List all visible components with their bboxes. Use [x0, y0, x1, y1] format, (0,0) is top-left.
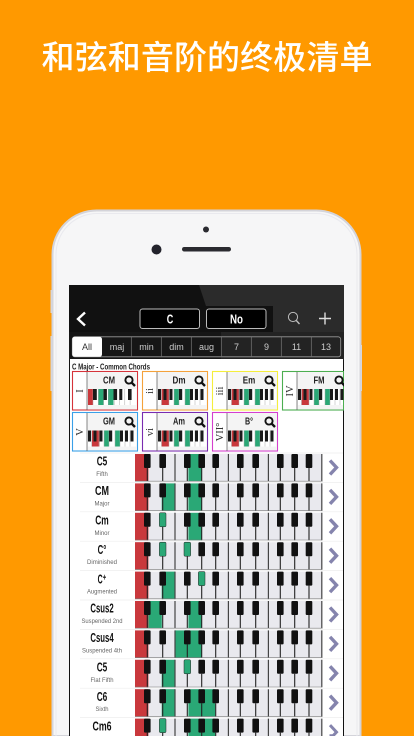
- chord card: CM: [72, 372, 138, 410]
- chord card: Dm: [142, 372, 208, 410]
- chord row: C5 fifth: [80, 453, 343, 482]
- chord row: C flat five: C5: [97, 660, 107, 674]
- chord row: Cm6 minor sixth: Cm6: [92, 719, 112, 733]
- phone mockup: [50, 210, 362, 736]
- chord row: CM major: Major: [94, 500, 110, 507]
- chord card: Dm: ii: [145, 388, 156, 394]
- selector No: No: [230, 312, 243, 326]
- chord row: Cm minor: Minor: [94, 530, 110, 537]
- chord row: Csus2: Suspended 2nd: [82, 618, 123, 625]
- chord row: C6 sixth: [80, 688, 343, 717]
- filter tabs: 7: [234, 342, 239, 352]
- chord row: Cm minor: Cm: [95, 513, 109, 527]
- title: 和弦和音阶的终极清单: [42, 39, 372, 76]
- chord row: Cm minor: [80, 512, 343, 540]
- key selector C: [140, 309, 200, 328]
- chord row: C dim: Diminished: [87, 559, 117, 566]
- chord row: C augmented: [80, 571, 343, 599]
- chord card: B dim: B°: [245, 416, 253, 428]
- front camera: [152, 244, 162, 254]
- back arrow: [78, 312, 85, 326]
- chord row: C6 sixth: Sixth: [96, 706, 109, 713]
- chord row: C dim: [80, 541, 343, 570]
- speaker: [182, 247, 231, 252]
- chord card: CM: CM: [103, 376, 115, 386]
- filter tabs: All: [82, 342, 92, 352]
- app screen: [69, 285, 345, 736]
- chord row: Cm6 minor sixth: [80, 718, 343, 736]
- chord row: C6 sixth: C6: [97, 690, 107, 704]
- chord row: C augmented: Augmented: [87, 589, 117, 596]
- filter tabs: aug: [199, 342, 214, 352]
- chord card: GM: GM: [103, 416, 115, 428]
- header highlight: [199, 285, 344, 335]
- chord card: Em: Em: [243, 376, 255, 386]
- chord card: B dim: [212, 412, 278, 451]
- chord row: C augmented: C⁺: [98, 572, 107, 586]
- chord row: C5 fifth: C5: [97, 455, 107, 469]
- chord card: FM: FM: [314, 376, 324, 386]
- filter tabs: 13: [321, 342, 331, 352]
- filter tabs: min: [139, 342, 154, 352]
- chord card: GM: V: [75, 428, 86, 436]
- chord row: Csus2: [80, 600, 343, 628]
- filter tabs: [72, 337, 341, 357]
- chord card: Em: [212, 372, 278, 410]
- heading: common chords: C Major - Common Chords: [72, 362, 150, 372]
- filter tabs: maj: [110, 342, 124, 352]
- content panel: [70, 359, 343, 736]
- chord card: FM: IV: [285, 385, 296, 397]
- chord row: CM major: CM: [95, 484, 109, 498]
- selector No: [206, 309, 266, 328]
- chord card: Am: [142, 412, 208, 451]
- chord card: CM: I: [75, 389, 86, 393]
- chord card: Dm: Dm: [172, 376, 186, 386]
- search icon: [288, 312, 300, 324]
- chord row: C flat five: [80, 659, 343, 687]
- phone body: [52, 210, 360, 736]
- filter tabs: 11: [292, 342, 301, 352]
- chord card: FM: [282, 372, 345, 410]
- key selector C: C: [167, 312, 174, 326]
- phone side buttons: [50, 290, 362, 391]
- plus icon: [319, 312, 331, 324]
- chord row: Csus4: [80, 629, 343, 658]
- chord card: GM: [72, 412, 138, 451]
- chord row: C dim: C°: [98, 543, 106, 557]
- chord row: Csus4: Suspended 4th: [82, 647, 122, 654]
- chord card: Am: Am: [173, 416, 185, 428]
- chord row: C5 fifth: Fifth: [96, 471, 108, 478]
- proximity sensor: [203, 226, 209, 232]
- chord card: Am: vi: [145, 428, 156, 436]
- phone inner rim: [56, 214, 357, 736]
- chord row: C flat five: Flat Fifth: [90, 677, 114, 684]
- chord row: Csus4: Csus4: [90, 631, 114, 645]
- chord card: B dim: VII°: [215, 423, 226, 441]
- filter tabs: dim: [169, 342, 184, 352]
- chord row: CM major: [80, 482, 343, 511]
- chord row: Csus2: Csus2: [90, 602, 114, 616]
- filter tabs: 9: [264, 342, 269, 352]
- chord card: Em: iii: [215, 387, 226, 395]
